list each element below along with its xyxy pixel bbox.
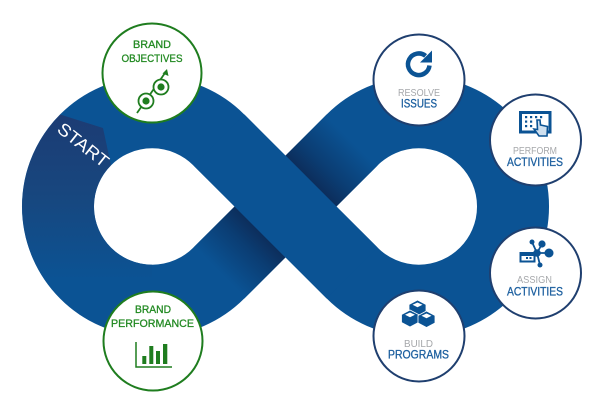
icon: touch keypad	[520, 112, 550, 136]
circle: build programs: BUILD	[404, 338, 433, 350]
circle: assign activities	[490, 228, 581, 318]
infinity band	[58, 112, 513, 301]
icon: stacked cubes	[402, 300, 435, 328]
start arrow segment	[22, 114, 152, 337]
circle: build programs: PROGRAMS	[388, 350, 449, 362]
circle: build programs	[374, 290, 464, 382]
circle: assign activities: ASSIGN	[517, 274, 552, 286]
circle: brand objectives: OBJECTIVES	[122, 53, 182, 65]
circle: brand performance: BRAND	[135, 304, 171, 316]
circle: perform activities: ACTIVITIES	[507, 157, 563, 169]
icon: bar chart	[136, 342, 172, 367]
circle: brand performance: PERFORMANCE	[111, 318, 194, 330]
circle: resolve issues	[374, 34, 464, 126]
circle: brand objectives: BRAND	[133, 39, 171, 51]
start label: START	[54, 118, 113, 172]
icon: node network	[520, 240, 554, 268]
circle: resolve issues: ISSUES	[401, 98, 437, 110]
circle: perform activities: PERFORM	[513, 145, 557, 157]
circle: perform activities	[490, 94, 581, 186]
circle: assign activities: ACTIVITIES	[507, 286, 563, 298]
circle: resolve issues: RESOLVE	[398, 87, 440, 99]
circle: brand objectives	[102, 24, 202, 122]
icon: refresh arrow	[408, 50, 432, 75]
icon: targets with arrow	[137, 69, 168, 113]
circle: brand performance	[104, 292, 202, 390]
